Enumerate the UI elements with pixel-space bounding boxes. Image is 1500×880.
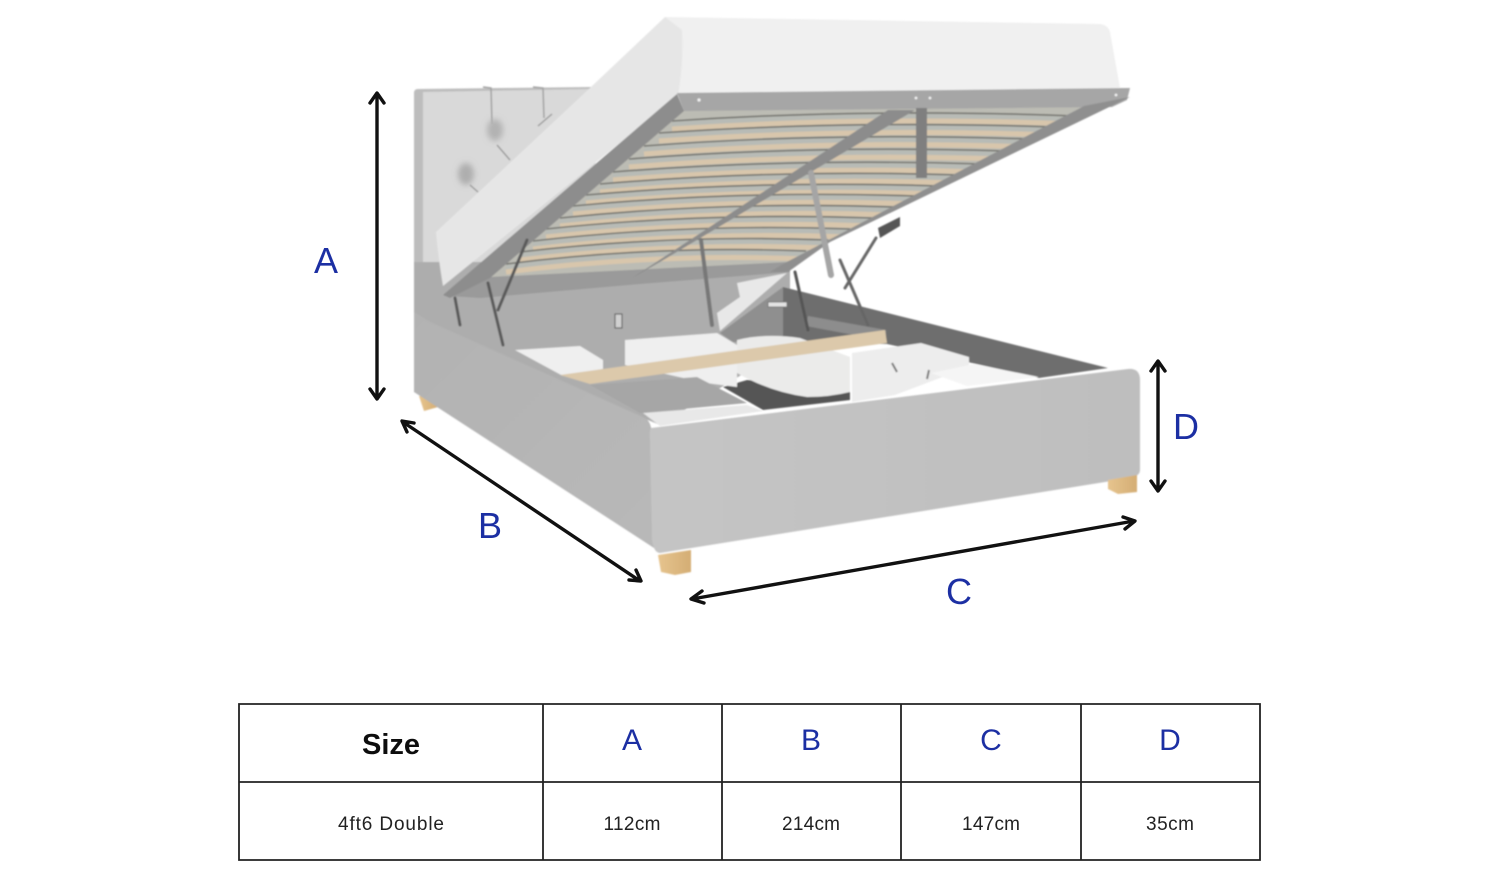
interior far wall <box>783 287 1108 378</box>
side rail <box>414 312 654 548</box>
bolt row <box>697 98 701 102</box>
dimension label A: A <box>314 240 338 281</box>
table grid <box>239 704 1260 860</box>
dimension arrow B <box>402 421 641 581</box>
arm left a <box>498 240 527 310</box>
dimension label C: C <box>946 571 972 612</box>
tuft upper <box>487 119 503 141</box>
value A: 112cm <box>604 814 660 835</box>
dimension label B: B <box>478 505 502 546</box>
dimension arrow A <box>370 93 384 399</box>
bracket right <box>768 302 787 307</box>
slatted base <box>488 105 1086 279</box>
leg right corner <box>1108 475 1137 494</box>
value C: 147cm <box>962 814 1020 835</box>
value D: 35cm <box>1146 814 1194 835</box>
box right small <box>931 364 1039 386</box>
strut centre <box>701 240 712 325</box>
box small left <box>515 346 603 376</box>
arm right c <box>795 272 808 330</box>
strut right <box>811 173 831 275</box>
hinge block <box>878 217 900 238</box>
leg front corner <box>658 550 691 575</box>
floor <box>723 380 850 410</box>
dimension arrow D <box>1151 361 1165 491</box>
bed illustration <box>414 17 1140 575</box>
grey pillow <box>590 377 747 413</box>
frame bolts <box>697 94 1117 102</box>
slats <box>506 113 1076 272</box>
header: A: A <box>622 724 642 757</box>
dimension label D: D <box>1173 406 1199 447</box>
header: D: D <box>1159 724 1181 757</box>
lower bar <box>450 262 790 298</box>
box clasp <box>892 363 929 379</box>
headboard straps <box>483 87 544 124</box>
left rail <box>443 94 684 298</box>
slat backing <box>488 105 1086 279</box>
storage contents <box>515 330 1039 426</box>
centre strut <box>632 110 915 278</box>
headboard <box>414 87 600 320</box>
headboard tufting <box>458 114 552 192</box>
gas struts and arms <box>455 173 876 345</box>
vertical bracket <box>916 108 927 178</box>
headboard inner face <box>423 89 600 262</box>
lower white box <box>643 405 763 426</box>
header: B: B <box>801 724 821 757</box>
row label: 4ft6 Double <box>338 814 444 835</box>
hinge brackets <box>615 302 886 341</box>
interior corner wall <box>720 287 783 342</box>
right rail <box>770 97 1130 272</box>
arm left b <box>488 283 503 345</box>
back leg <box>419 396 438 411</box>
arm left c <box>455 298 460 325</box>
foot end rail <box>650 369 1140 553</box>
white pillow <box>737 336 850 397</box>
front bar <box>677 88 1130 111</box>
front legs <box>658 475 1137 575</box>
header: C: C <box>980 724 1002 757</box>
size table <box>239 704 1260 860</box>
white panel flap <box>717 273 787 331</box>
header: Size: Size <box>362 729 420 761</box>
lifted mattress <box>436 17 1120 286</box>
tuft lower <box>458 163 474 185</box>
mattress end face <box>665 17 1120 94</box>
storage back wall <box>414 262 790 425</box>
box right tall <box>852 343 969 402</box>
value B: 214cm <box>782 814 840 835</box>
wooden cross slat <box>560 330 887 384</box>
box centre <box>625 333 737 387</box>
dimension arrow C <box>691 517 1135 603</box>
tuft folds <box>470 114 552 192</box>
metal frame <box>443 88 1130 298</box>
arm right b <box>840 260 868 325</box>
arm right a <box>845 238 876 288</box>
plate <box>806 316 886 341</box>
bracket centre <box>615 314 622 328</box>
mattress side <box>436 17 682 286</box>
